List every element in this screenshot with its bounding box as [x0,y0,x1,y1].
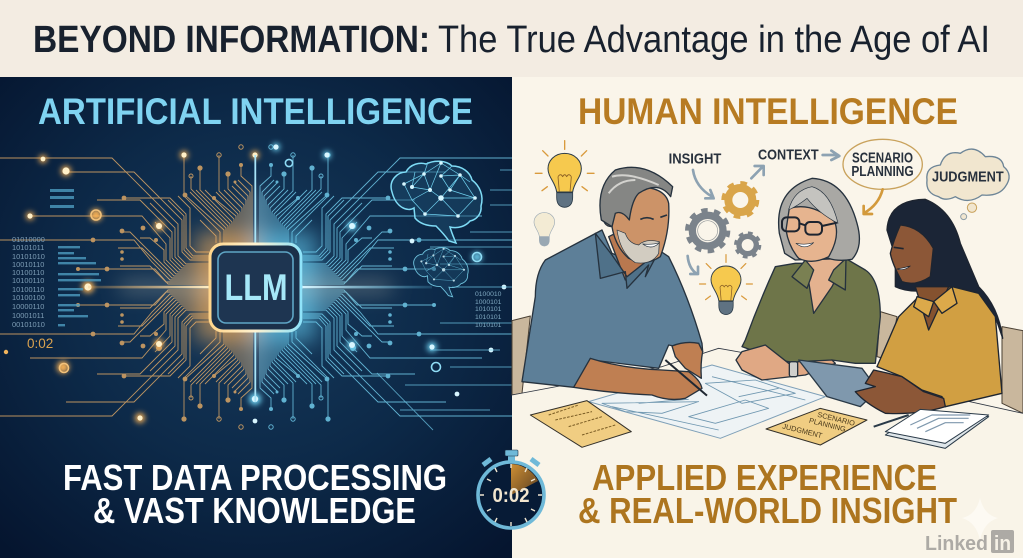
woman right [855,199,1003,414]
watermark: LinkedIn: Linked [925,533,988,555]
header band [0,0,1023,77]
binary column left: 10101010 [12,252,45,261]
title: BEYOND INFORMATION: [33,19,430,61]
forearm and hand [855,370,945,414]
arrows [688,151,883,274]
diagram labels: INSIGHT [669,151,722,167]
binary column right: 1010101 [475,322,502,329]
title [33,19,990,61]
note left [530,401,631,447]
note middle: PLANNING [808,416,847,434]
note middle: SCENARIO [817,410,856,428]
man face [640,215,667,219]
icon: stopwatch 0:02 [478,450,544,528]
binary column right: 1010101 [475,314,502,321]
heading: human intelligence: HUMAN INTELLIGENCE [578,91,958,132]
paper stack [885,409,989,448]
icon: large neural brain [391,161,482,243]
tablet [799,360,878,407]
binary column left: 10100110 [12,268,44,277]
binary column left: 00101010 [12,320,45,329]
watermark: LinkedIn [925,530,1014,555]
glasses [782,217,837,235]
circuit traces: right blue [260,145,512,429]
heading: artificial intelligence: ARTIFICIAL INTELLIGENCE [38,91,473,132]
panel: artificial intelligence [0,77,512,558]
binary column left: 10010110 [12,260,44,269]
scenario planning bubble: SCENARIO [852,150,913,166]
binary column left [12,235,45,329]
watermark: sparkle [962,498,998,540]
man shirt [522,230,703,387]
man beard [617,230,659,263]
table [512,348,1023,558]
man head [603,185,669,262]
icon: small grey gear [736,233,760,257]
binary column left: 10000110 [12,302,44,311]
judgment thought cloud: JUDGMENT [932,170,1004,186]
olive shirt [742,258,880,363]
caption: applied experience: & REAL-WORLD INSIGHT [578,490,957,531]
man hair [600,167,673,227]
man [522,167,707,399]
watermark: LinkedIn: in [994,533,1011,555]
chip glow [120,190,392,384]
caption: applied experience [578,457,957,531]
binary column left: 10100100 [12,293,45,302]
caption: fast data processing: & VAST KNOWLEDGE [93,490,416,531]
icon: pale light bulb [534,213,555,246]
diagram labels: CONTEXT [758,147,819,163]
icon: small neural brain [414,248,468,297]
man forearms [574,358,702,399]
binary column right: 1010101 [475,306,502,313]
caption: fast data processing [63,457,447,531]
circuit traces: left orange [0,145,252,429]
blueprint [589,365,825,438]
icon: grey gear [688,211,728,251]
binary column left: 10100110 [12,276,44,285]
glowing nodes [4,143,506,423]
caption: fast data processing: FAST DATA PROCESSING [63,457,447,498]
face [786,207,837,261]
extra traces to right edge [377,170,512,430]
grey hair back [779,178,859,260]
clasped hands [736,345,835,380]
binary column left: 10001011 [12,311,44,320]
panel: human intelligence [512,77,1023,558]
illustration: team around table [512,139,1023,558]
icon: gold gear [724,183,757,217]
chip labelled LLM [210,244,301,331]
pen [665,360,707,396]
binary column right [475,291,502,329]
watch [789,362,798,377]
binary column right: 0100010 [475,291,502,298]
pen on table [874,415,909,427]
binary column right: 1000101 [475,299,502,306]
chairs [512,312,1023,413]
data bars left [50,189,101,326]
face [890,225,933,283]
note middle: JUDGMENT [782,422,824,440]
timer readout 0:02: 0:02 [27,336,53,351]
icon: stopwatch 0:02: 0:02 [492,485,530,507]
binary column left: 10100110 [12,285,44,294]
woman centre [736,178,880,380]
mustard shirt [877,287,1002,407]
scenario planning bubble: PLANNING [851,164,914,180]
note middle [766,408,867,445]
binary column left: 01010000 [12,235,45,244]
judgment thought cloud [927,149,1009,220]
man neck [609,230,659,280]
long dark hair [887,199,1003,338]
chip labelled LLM: LLM [224,267,288,308]
binary column left: 10101011 [12,243,44,252]
scenario planning bubble [843,139,922,189]
diagram labels [669,147,819,167]
light beams [88,155,432,402]
caption: applied experience: APPLIED EXPERIENCE [592,457,937,498]
icon: lower light bulb [700,255,752,315]
icon: large light bulb [535,141,594,207]
